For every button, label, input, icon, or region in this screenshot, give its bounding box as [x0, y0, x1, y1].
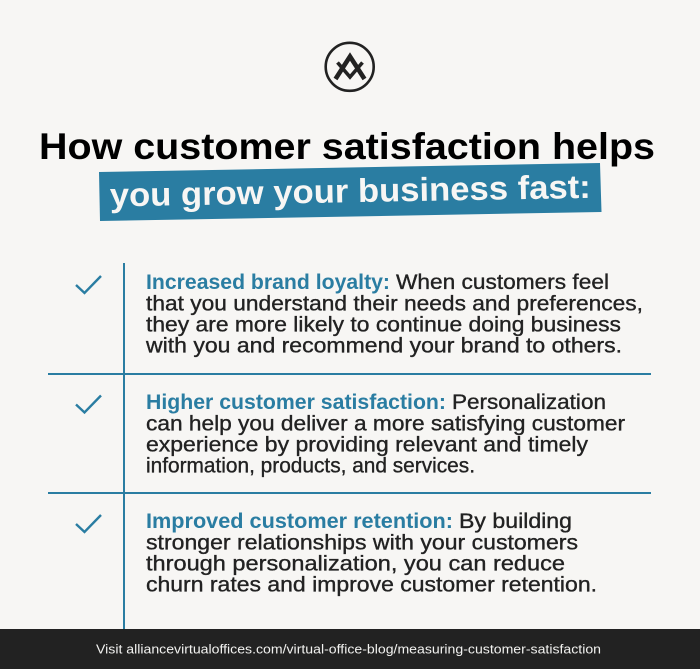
icon: check 1 [76, 276, 101, 293]
horizontal divider 1 [48, 373, 651, 375]
text block: higher customer satisfaction [146, 391, 625, 478]
text block: improved customer retention: stronger relationships with your customers [146, 532, 578, 554]
text block: higher customer satisfaction: information, products, and services. [146, 454, 475, 478]
text block: increased brand loyalty: When customers feel [396, 271, 609, 294]
highlighted subtitle banner: you grow your business fast: [109, 168, 591, 213]
horizontal divider 2 [48, 492, 651, 494]
text block: increased brand loyalty [145, 271, 643, 358]
text block: higher customer satisfaction: can help you deliver a more satisfying customer [146, 412, 625, 436]
text block: higher customer satisfaction: Higher customer satisfaction: [146, 391, 446, 414]
text block: increased brand loyalty: they are more likely to continue doing business [146, 314, 621, 336]
title: How customer satisfaction helps [39, 126, 655, 167]
text block: increased brand loyalty: that you understand their needs and preferences, [146, 292, 643, 316]
text block: improved customer retention: churn rates and improve customer retention. [146, 574, 597, 596]
vertical divider [123, 263, 125, 629]
icon: check 2 [76, 396, 101, 412]
footer bar [0, 629, 700, 669]
text block: increased brand loyalty: with you and recommend your brand to others. [145, 334, 622, 358]
text block: improved customer retention: Improved customer retention: [146, 510, 453, 533]
text block: higher customer satisfaction: experience by providing relevant and timely [146, 434, 589, 456]
text block: increased brand loyalty: Increased brand loyalty: [146, 271, 390, 294]
footer bar: Visit alliancevirtualoffices.com/virtual-office-blog/measuring-customer-satisfaction [96, 642, 601, 656]
text block: improved customer retention: through personalization, you can reduce [146, 552, 565, 576]
icon: check 3 [76, 515, 101, 532]
text block: higher customer satisfaction: Personalization [452, 391, 606, 414]
text block: improved customer retention: By building [459, 510, 572, 533]
text block: improved customer retention [146, 510, 597, 596]
icon: logo [326, 43, 374, 91]
